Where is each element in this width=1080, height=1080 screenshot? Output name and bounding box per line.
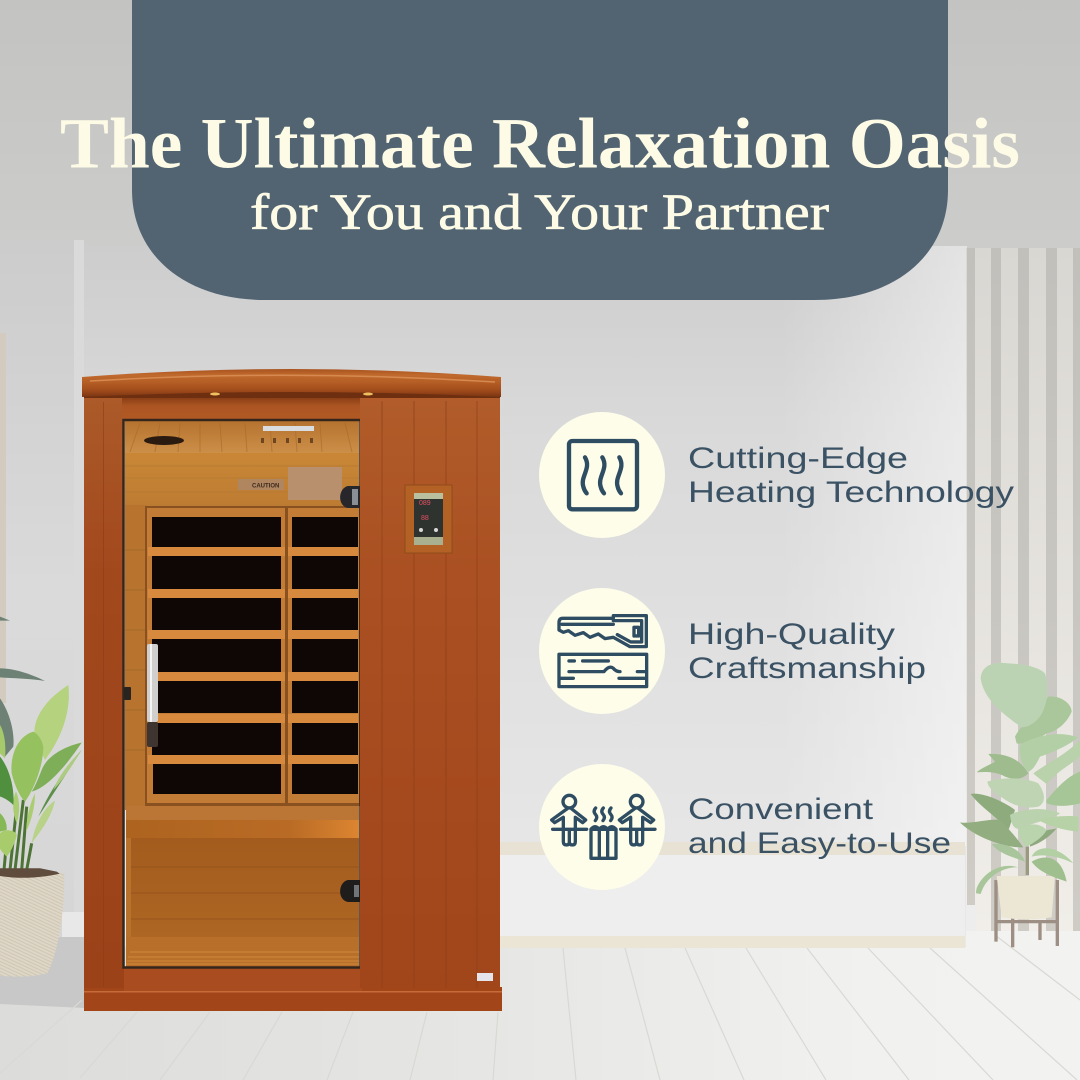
feature label: and Easy-to-Use [688,827,951,860]
slatted wall panel [966,248,1080,932]
feature label [688,793,951,860]
left wall [0,240,75,940]
heating panels [145,506,360,806]
title [60,104,1020,241]
fiddle leaves [1015,696,1072,744]
icon: two people and heater [539,764,665,890]
warning plate: CAUTION [252,484,279,490]
plant pot [997,876,1055,919]
top hinge [340,486,360,508]
left potted plant [0,617,82,977]
backing shadow [84,388,500,408]
crown moulding [82,369,501,397]
right potted plant [960,663,1080,947]
sauna cabin [82,369,502,1011]
feature label: Convenient [688,793,874,826]
instruction label [288,467,342,500]
plant stand [996,880,1058,947]
right wood panel [360,398,500,988]
icon: heat panel [539,412,665,538]
icon: saw and board [539,588,665,714]
feature 3: easy to use [539,764,951,890]
pot [0,873,64,977]
control panel [405,485,452,553]
feature label: Cutting-Edge [688,442,908,475]
feature label: High-Quality [688,618,895,651]
feature label [688,442,1014,509]
feature 2: craftsmanship [539,588,926,714]
feature 1: heating technology [539,412,1014,538]
warning plate [238,479,284,490]
floor [0,931,1080,1080]
control panel: 88 [421,515,429,522]
stems [4,800,32,870]
door handle [124,644,158,747]
subtitle: for You and Your Partner [250,185,829,241]
glass door edge [124,420,360,968]
threshold [124,967,362,991]
left post [84,398,124,988]
soil [0,868,62,879]
interior ceiling [125,421,359,453]
ceiling [0,0,1080,248]
bench [126,806,359,938]
interior rear wall [125,453,359,810]
feature label: Heating Technology [688,476,1014,509]
base plinth [84,987,502,1011]
palm fronds [0,617,45,757]
wainscot [500,842,965,948]
feature label: Craftsmanship [688,652,926,685]
control panel: 089 [419,500,431,507]
feature label [688,618,926,685]
title: The Ultimate Relaxation Oasis [60,104,1020,184]
interior floor [126,937,359,967]
bottom hinge [340,880,360,902]
leaves [34,685,69,760]
header beam [122,398,362,421]
back wall [83,246,967,946]
header panel [132,0,948,300]
